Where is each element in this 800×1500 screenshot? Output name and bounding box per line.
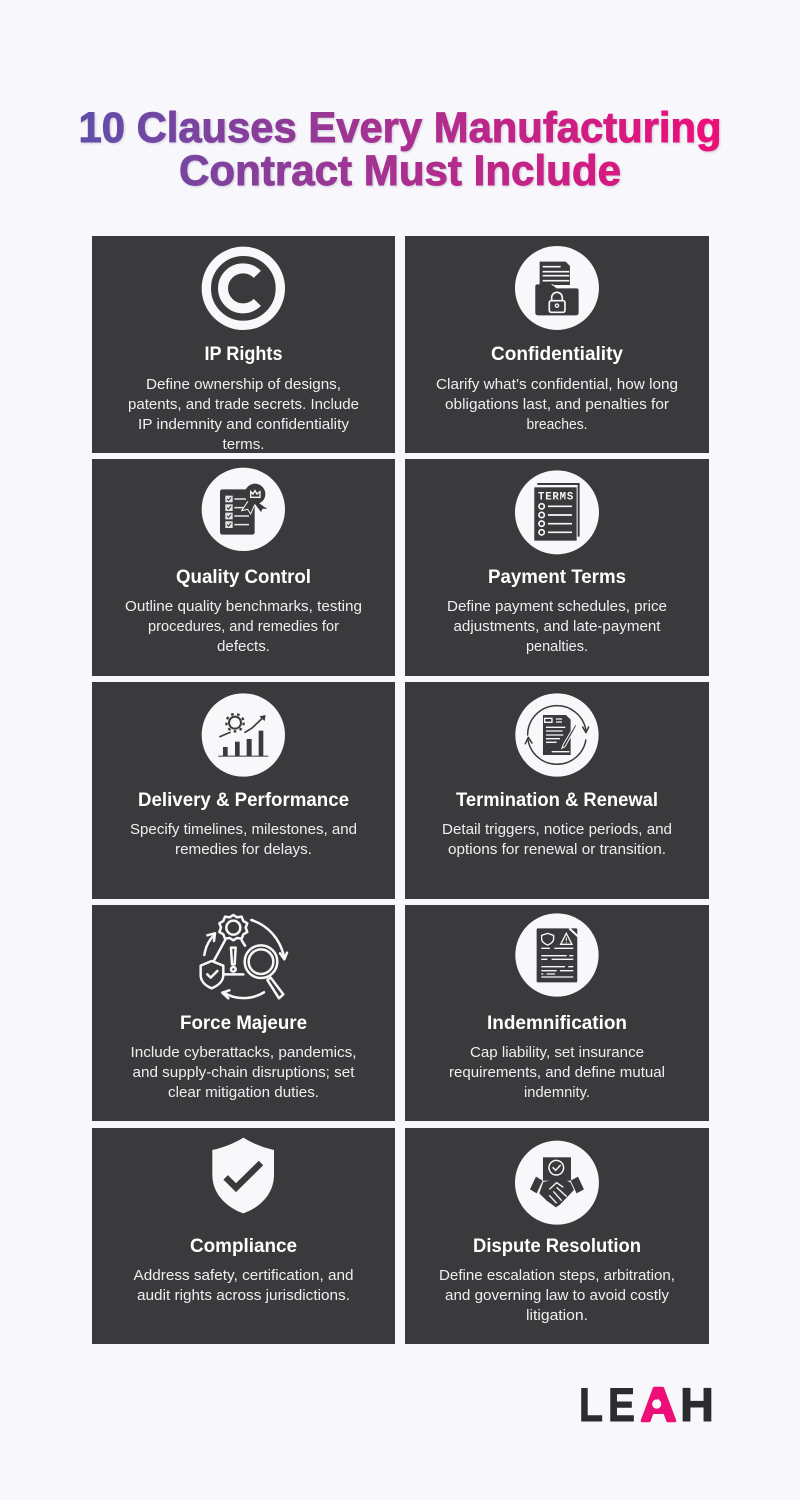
panel: IP Rights bbox=[92, 236, 395, 453]
logo: LEAH: L bbox=[579, 1378, 603, 1431]
icon: locked folder with document bbox=[515, 246, 599, 330]
icon: document with pen and renewal arrows bbox=[515, 693, 599, 777]
description: obligations last, and penalties for bbox=[445, 397, 669, 413]
logo: LEAH: H bbox=[680, 1378, 714, 1431]
description bbox=[128, 377, 359, 453]
panel: Compliance bbox=[92, 1128, 395, 1344]
description: indemnity. bbox=[524, 1085, 590, 1101]
panel: Payment Terms bbox=[405, 459, 709, 676]
logo: LEAH: E bbox=[608, 1378, 635, 1431]
heading: Payment Terms bbox=[488, 567, 626, 588]
title: 10 Clauses Every Manufacturing bbox=[78, 104, 722, 152]
panel: Confidentiality bbox=[405, 236, 709, 453]
description: Specify timelines, milestones, and bbox=[130, 822, 357, 838]
description: Detail triggers, notice periods, and bbox=[442, 822, 672, 838]
description: Define escalation steps, arbitration, bbox=[439, 1268, 675, 1284]
description: Address safety, certification, and bbox=[134, 1268, 354, 1284]
description: options for renewal or transition. bbox=[448, 842, 666, 858]
description: Include cyberattacks, pandemics, bbox=[130, 1045, 356, 1061]
heading: IP Rights bbox=[204, 344, 282, 365]
description bbox=[125, 599, 362, 655]
description: clear mitigation duties. bbox=[168, 1085, 319, 1101]
heading: Compliance bbox=[190, 1236, 297, 1257]
heading: Quality Control bbox=[176, 567, 311, 588]
description: Define ownership of designs, bbox=[146, 377, 341, 393]
heading: Force Majeure bbox=[180, 1013, 307, 1034]
description: procedures, and remedies for bbox=[148, 619, 339, 635]
heading: Confidentiality bbox=[491, 344, 623, 365]
description: IP indemnity and confidentiality bbox=[138, 417, 350, 433]
description: penalties. bbox=[526, 639, 588, 655]
title bbox=[78, 104, 722, 195]
heading: Delivery & Performance bbox=[138, 790, 349, 811]
description bbox=[449, 1045, 665, 1101]
icon: checklist with award ribbon bbox=[202, 468, 285, 551]
panel: Quality Control bbox=[92, 459, 395, 676]
panel: Indemnification bbox=[405, 905, 709, 1121]
panel: Termination & Renewal bbox=[405, 682, 709, 899]
icon: handshake with approved document bbox=[515, 1141, 599, 1225]
description: Define payment schedules, price bbox=[447, 599, 667, 615]
description bbox=[130, 1045, 356, 1101]
title: Contract Must Include bbox=[179, 147, 621, 195]
description: and supply-chain disruptions; set bbox=[132, 1065, 354, 1081]
icon: terms document bbox=[515, 470, 599, 554]
description: breaches. bbox=[526, 417, 588, 433]
description: Cap liability, set insurance bbox=[470, 1045, 644, 1061]
description: requirements, and define mutual bbox=[449, 1065, 665, 1081]
description: and governing law to avoid costly bbox=[445, 1288, 670, 1304]
description: Outline quality benchmarks, testing bbox=[125, 599, 362, 615]
icon: shield with check mark bbox=[212, 1138, 274, 1213]
heading: Indemnification bbox=[487, 1013, 627, 1034]
description: terms. bbox=[222, 437, 264, 453]
panel: Force Majeure bbox=[92, 905, 395, 1121]
description: Clarify what’s confidential, how long bbox=[436, 377, 678, 393]
heading: Dispute Resolution bbox=[473, 1236, 641, 1257]
description: remedies for delays. bbox=[175, 842, 312, 858]
description: audit rights across jurisdictions. bbox=[137, 1288, 350, 1304]
description bbox=[439, 1268, 675, 1324]
panel: Dispute Resolution bbox=[405, 1128, 709, 1344]
heading: Termination & Renewal bbox=[456, 790, 658, 811]
icon: liability document with shield and warning bbox=[515, 913, 599, 997]
description: patents, and trade secrets. Include bbox=[128, 397, 359, 413]
description bbox=[130, 822, 357, 858]
logo: LEAH bbox=[579, 1378, 714, 1431]
description: adjustments, and late-payment bbox=[454, 619, 660, 635]
logo: LEAH: A bbox=[641, 1378, 676, 1431]
icon: copyright symbol bbox=[206, 251, 280, 325]
description: defects. bbox=[217, 639, 270, 655]
icon: risk cycle with gear, shield and magnifier bbox=[201, 915, 287, 998]
icon: gear and growth chart bbox=[202, 693, 285, 777]
icon: terms document: TERMS bbox=[538, 492, 574, 504]
description bbox=[447, 599, 667, 655]
description bbox=[442, 822, 672, 858]
description: litigation. bbox=[526, 1308, 588, 1324]
panel: Delivery & Performance bbox=[92, 682, 395, 899]
description bbox=[134, 1268, 354, 1304]
description bbox=[436, 377, 678, 433]
